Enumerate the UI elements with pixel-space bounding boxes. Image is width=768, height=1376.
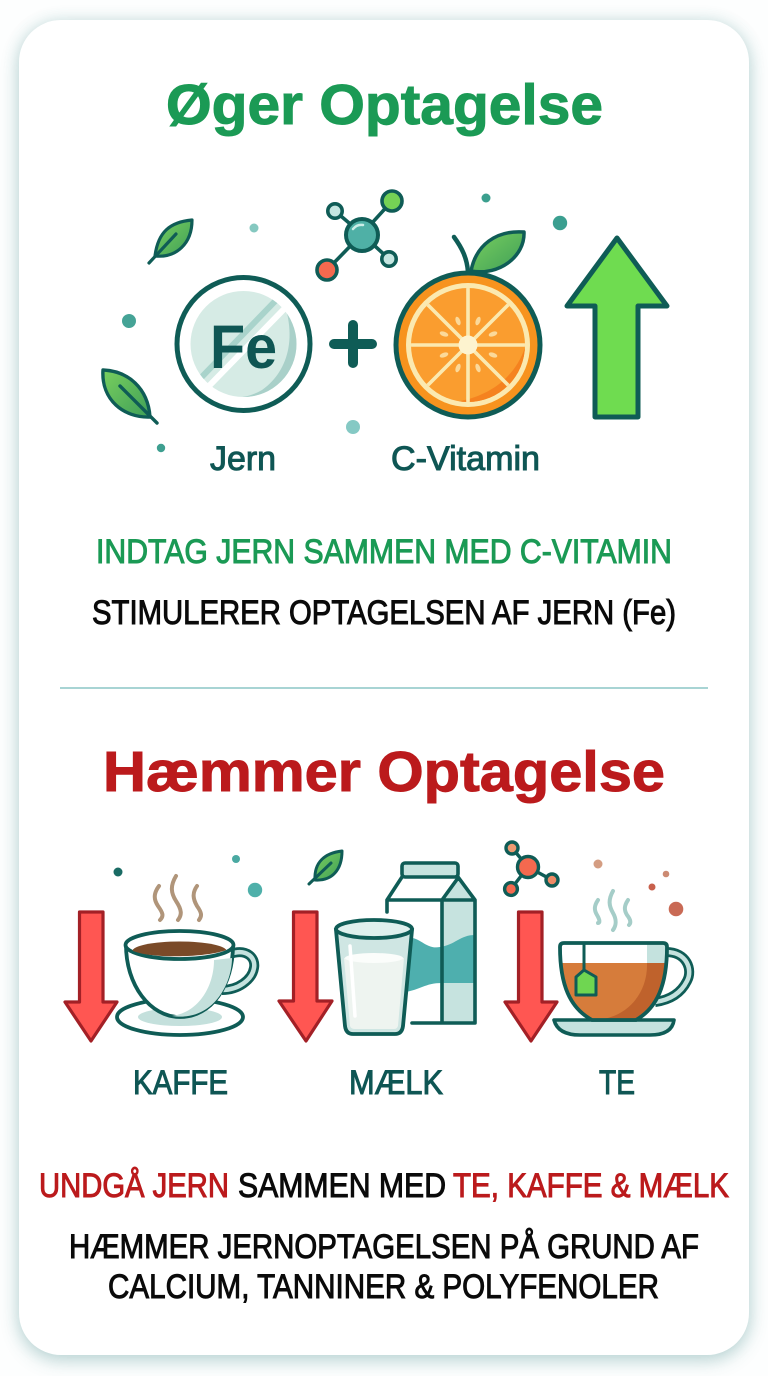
heading: Øger Optagelse: Øger Optagelse <box>166 73 603 137</box>
text: inhibits line two: CALCIUM, TANNINER & POLYFENOLER <box>108 1268 659 1306</box>
steam <box>155 876 201 920</box>
heading: Hæmmer Optagelse: Hæmmer Optagelse <box>103 740 665 804</box>
text: avoid iron: TE, KAFFE & MÆLK <box>453 1167 729 1205</box>
icon: leaf milk <box>309 851 342 884</box>
icon: milk carton <box>387 863 475 1023</box>
panel: inhibits absorption <box>39 740 729 1306</box>
icon: milk glass <box>336 920 412 1034</box>
label: KAFFE: KAFFE <box>133 1064 228 1102</box>
text: avoid iron: UNDGÅ JERN <box>39 1167 229 1205</box>
steam <box>595 891 630 930</box>
icon: tea cup <box>554 891 689 1035</box>
icon: coffee cup <box>117 876 254 1035</box>
icon: red down arrow milk <box>279 912 332 1041</box>
panel: increases absorption <box>92 73 676 632</box>
label: Jern: Jern <box>210 440 276 478</box>
text: avoid iron <box>39 1167 729 1205</box>
icon: iron tablet <box>177 278 310 410</box>
icon: red down arrow tea <box>505 912 557 1041</box>
decorative dots top section <box>122 194 567 452</box>
icon: red down arrow coffee <box>65 912 117 1041</box>
decorative dots tea <box>594 860 683 916</box>
icon: molecule <box>317 191 402 280</box>
icon: iron tablet: Fe <box>210 313 277 381</box>
icon: plus <box>334 325 372 363</box>
text: advice green: INDTAG JERN SAMMEN MED C-VITAMIN <box>96 533 672 571</box>
label: TE: TE <box>599 1064 635 1102</box>
decorative dots coffee <box>114 855 262 897</box>
icon: leaf top <box>149 220 192 263</box>
label: MÆLK: MÆLK <box>349 1064 443 1102</box>
label: C-Vitamin: C-Vitamin <box>391 440 540 478</box>
icon: green up arrow <box>567 238 667 417</box>
text: avoid iron: SAMMEN MED <box>238 1167 446 1205</box>
icon: molecule tea <box>505 842 558 895</box>
icon: orange <box>396 232 540 417</box>
icon: leaf bottom <box>103 370 157 423</box>
text: stimulates: STIMULERER OPTAGELSEN AF JERN (Fe) <box>92 594 676 632</box>
